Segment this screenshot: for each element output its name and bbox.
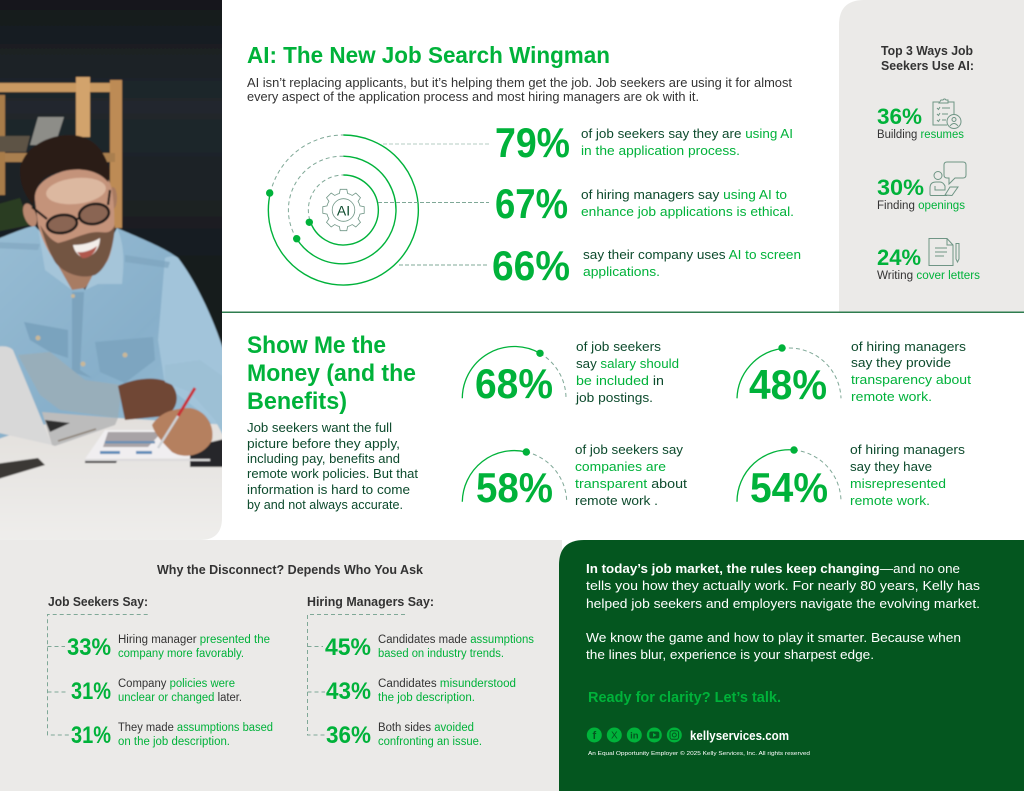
gauge: 68 percent (462, 347, 566, 407)
item: cover letters 24 percent: Writing cover letters (877, 270, 980, 282)
stat: 79 percent: of job seekers say they are using AI (581, 126, 793, 141)
column: hiring managers say: 36% (326, 722, 371, 749)
text: remote work transparency: say they provide (851, 355, 951, 370)
column: hiring managers say: 43% (326, 678, 371, 705)
item: openings 30 percent: Finding openings (877, 200, 965, 212)
column: hiring managers say: Candidates misunderstood (378, 678, 516, 690)
stat: 79 percent (495, 119, 793, 166)
icon: facebook: f (592, 730, 596, 742)
item: resumes 36 percent: 36% (877, 104, 922, 129)
panel: why the disconnect (0, 540, 562, 791)
website: kellyservices.com (690, 728, 789, 743)
text: salary in job postings: job postings. (575, 390, 653, 405)
text: remote work transparency: transparency about (851, 372, 971, 387)
text: salary in job postings: be included in (576, 373, 664, 388)
text block: job seekers want the full picture: Job seekers want the full (247, 421, 392, 435)
text block: job seekers want the full picture: information is hard to come (247, 483, 410, 497)
heading: show me the money: Benefits) (247, 388, 347, 415)
stat: 66 percent: applications. (583, 264, 660, 279)
panel: call to action (559, 540, 1024, 791)
column: job seekers say: Hiring manager presented the (118, 634, 270, 646)
text block: job seekers want the full picture: picture before they apply, (247, 437, 400, 451)
text block: job seekers want the full picture: remote work policies. But that (247, 467, 419, 481)
stat: 67 percent: of hiring managers say using AI to (581, 187, 787, 202)
chart: concentric rings with AI gear: AI (337, 202, 350, 218)
text: misrepresented remote work (850, 442, 966, 508)
column: job seekers say: 31% (71, 678, 111, 705)
text: misrepresented remote work: misrepresented (850, 476, 946, 491)
column: job seekers say: Company policies were (118, 678, 235, 690)
stat: 79 percent: 79% (495, 119, 570, 166)
icon: youtube (647, 728, 662, 742)
text: companies transparent: transparent about (575, 476, 687, 491)
panel heading: Seekers Use AI: (881, 58, 974, 73)
column: hiring managers say: based on industry trends. (378, 648, 504, 660)
call to action line: Ready for clarity? Let’s talk. (588, 690, 781, 706)
intro text: AI isn’t replacing applicants, but it’s helping them get the job. Job seekers are using it for almost (247, 76, 793, 90)
item: openings 30 percent: 30% (877, 175, 924, 200)
text: misrepresented remote work: remote work. (850, 493, 930, 508)
panel: top 3 ways (839, 0, 1024, 312)
gauge: 48 percent (737, 344, 841, 408)
column: job seekers say: unclear or changed later. (118, 692, 242, 704)
icon: person with speech bubble (930, 162, 966, 196)
gauge: 48 percent: 48% (749, 361, 827, 408)
text block: job seekers want the full picture (247, 421, 419, 512)
icon: linkedin: in (630, 730, 639, 742)
text: remote work transparency (851, 339, 971, 404)
gauge: 54 percent (737, 446, 841, 511)
text: companies transparent: of job seekers say (575, 442, 684, 457)
icon: instagram (667, 728, 682, 742)
stat: 67 percent: 67% (495, 180, 568, 227)
icon: document with pencil (929, 238, 959, 266)
heading: show me the money: Money (and the (247, 360, 416, 387)
gauge: 68 percent: 68% (475, 360, 553, 407)
column: job seekers say: company more favorably. (118, 648, 244, 660)
text: companies transparent (575, 442, 687, 508)
column: job seekers say: Job Seekers Say: (48, 594, 148, 609)
icon: clipboard with person (933, 99, 961, 128)
body copy: We know the game and how to play it smarter. Because when (586, 630, 961, 645)
column: job seekers say: They made assumptions based (118, 722, 273, 734)
item: resumes 36 percent: Building resumes (877, 129, 964, 141)
column: job seekers say: 31% (71, 722, 111, 749)
gauge: 54 percent: 54% (750, 464, 828, 511)
chart: concentric rings with AI gear (266, 135, 489, 285)
heading: show me the money: Show Me the (247, 332, 386, 359)
body copy: the lines blur, experience is your sharpest edge. (586, 647, 874, 662)
text: salary in job postings: say salary should (576, 356, 679, 371)
text block: job seekers want the full picture: by and not always accurate. (247, 498, 403, 512)
column: job seekers say: on the job description. (118, 736, 230, 748)
stat: 66 percent: 66% (492, 242, 570, 289)
panel heading (881, 43, 974, 73)
column: hiring managers say: 45% (325, 634, 371, 661)
column: job seekers say (48, 594, 273, 749)
item: cover letters 24 percent (877, 245, 980, 282)
text: companies transparent: remote work . (575, 493, 658, 508)
text block: job seekers want the full picture: including pay, benefits and (247, 452, 400, 466)
legal line: An Equal Opportunity Employer © 2025 Kelly Services, Inc. All rights reserved (588, 750, 810, 757)
text: misrepresented remote work: of hiring managers (850, 442, 966, 457)
item: resumes 36 percent (877, 104, 964, 141)
heading: show me the money (247, 332, 416, 415)
body copy (586, 561, 981, 662)
column: hiring managers say: Candidates made assumptions (378, 634, 534, 646)
text: remote work transparency: of hiring managers (851, 339, 967, 354)
text: salary in job postings (575, 339, 679, 405)
icon: X (607, 728, 622, 742)
column: hiring managers say (307, 594, 534, 749)
stat: 67 percent (495, 180, 794, 227)
column: hiring managers say: Both sides avoided (378, 722, 474, 734)
stat: 79 percent: in the application process. (581, 143, 740, 158)
text: remote work transparency: remote work. (851, 389, 932, 404)
intro text: every aspect of the application process and most hiring managers are ok with it. (247, 90, 699, 104)
intro text (247, 76, 793, 104)
item: cover letters 24 percent: 24% (877, 245, 921, 270)
gauge: 58 percent (462, 448, 567, 511)
icon: linkedin (627, 728, 642, 742)
text: companies transparent: companies are (575, 459, 666, 474)
body copy: In today’s job market, the rules keep changing —and no one (586, 561, 960, 576)
stat: 66 percent (492, 242, 801, 289)
photo: smiling man writing at laptop (0, 0, 230, 545)
item: openings 30 percent (877, 175, 965, 212)
stat: 66 percent: say their company uses AI to screen (583, 247, 801, 262)
text: misrepresented remote work: say they have (850, 459, 932, 474)
body copy: tells you how they actually work. For nearly 80 years, Kelly has (586, 578, 981, 593)
panel heading: disconnect: Why the Disconnect? Depends Who You Ask (157, 562, 424, 577)
icon: X: X (611, 730, 618, 742)
column: hiring managers say: Hiring Managers Say: (307, 594, 434, 609)
divider line (222, 312, 1024, 313)
column: hiring managers say: the job description. (378, 692, 475, 704)
panel heading: Top 3 Ways Job (881, 43, 973, 58)
gauge: 58 percent: 58% (476, 464, 553, 511)
heading: AI wingman: AI: The New Job Search Wingman (247, 42, 610, 68)
body copy: helped job seekers and employers navigate the evolving market. (586, 596, 980, 611)
column: job seekers say: 33% (67, 634, 111, 661)
stat: 67 percent: enhance job applications is ethical. (581, 204, 794, 219)
icon: facebook (587, 728, 602, 742)
column: hiring managers say: confronting an issue. (378, 736, 482, 748)
text: salary in job postings: of job seekers (576, 339, 662, 354)
